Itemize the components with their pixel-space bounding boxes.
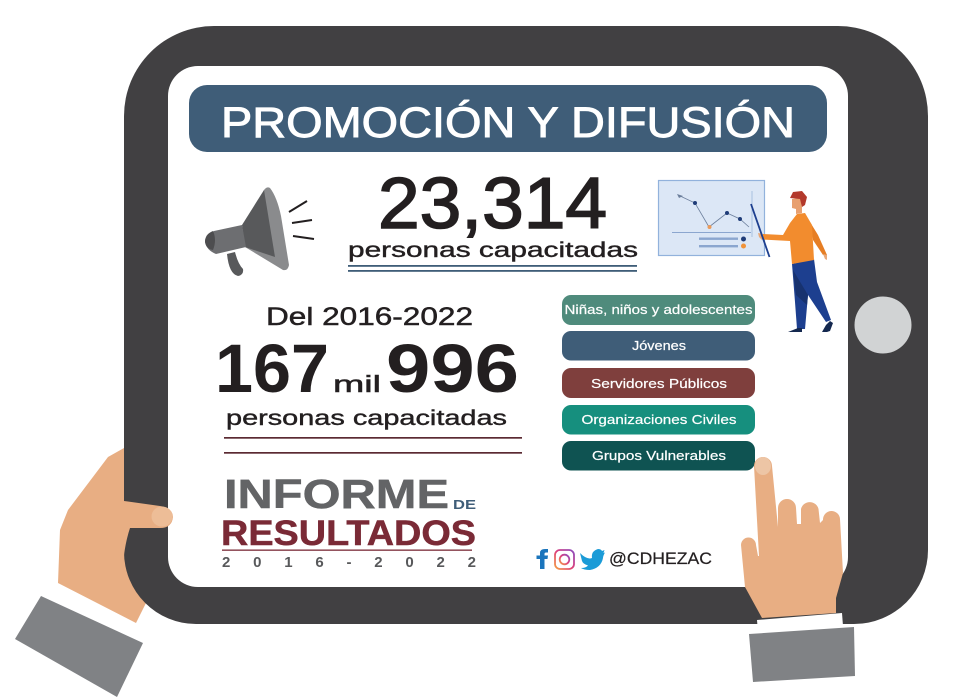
audience pills: [562, 295, 755, 470]
pill: civil organizations: Organizaciones Civiles: [582, 412, 737, 427]
report logo: DE: [453, 498, 476, 512]
pill: vulnerable groups: [562, 441, 755, 470]
pill: civil organizations: [562, 405, 755, 434]
right cuff: [757, 613, 843, 632]
report logo: [221, 471, 476, 571]
illustration: presenter with chart: [658, 180, 833, 332]
right sleeve: [749, 627, 855, 682]
caption rules: [224, 437, 522, 454]
icon: facebook: [536, 549, 548, 569]
pill: youth: Jóvenes: [632, 338, 687, 353]
cumulative total: 167: [215, 330, 329, 407]
main number: 23,314: [378, 164, 607, 244]
presenter: [751, 191, 833, 332]
pill: children: Niñas, niños y adolescentes: [564, 302, 753, 317]
pill: public servants: [562, 368, 755, 398]
chart board: [658, 180, 764, 256]
social handle: @CDHEZAC: [609, 550, 712, 568]
pill: public servants: Servidores Públicos: [591, 376, 728, 391]
left sleeve: [15, 596, 143, 697]
title banner: [189, 85, 827, 152]
left hand palm: [58, 448, 150, 623]
report logo: RESULTADOS: [221, 514, 476, 553]
pill: children: [562, 295, 755, 325]
icon: megaphone: [205, 187, 314, 276]
home button: [854, 296, 912, 354]
report logo: 2016-2022: [222, 554, 476, 571]
icon: instagram: [555, 550, 574, 569]
left thumb: [124, 501, 173, 555]
cumulative total: [215, 330, 519, 407]
cumulative total: mil: [333, 371, 381, 397]
pill: vulnerable groups: Grupos Vulnerables: [592, 448, 727, 463]
cumulative caption: personas capacitadas: [226, 407, 507, 430]
caption underline: [348, 265, 637, 272]
main number caption: personas capacitadas: [348, 239, 638, 262]
period label: Del 2016-2022: [266, 303, 473, 331]
icon: twitter: [580, 549, 605, 570]
tablet screen: [168, 66, 848, 587]
right hand: [741, 457, 843, 618]
cumulative total: 996: [386, 330, 519, 407]
report logo: INFORME: [224, 471, 449, 517]
social media handles: [536, 549, 712, 570]
tablet body: [124, 26, 928, 624]
pill: youth: [562, 331, 755, 360]
title banner: PROMOCIÓN Y DIFUSIÓN: [221, 99, 795, 147]
